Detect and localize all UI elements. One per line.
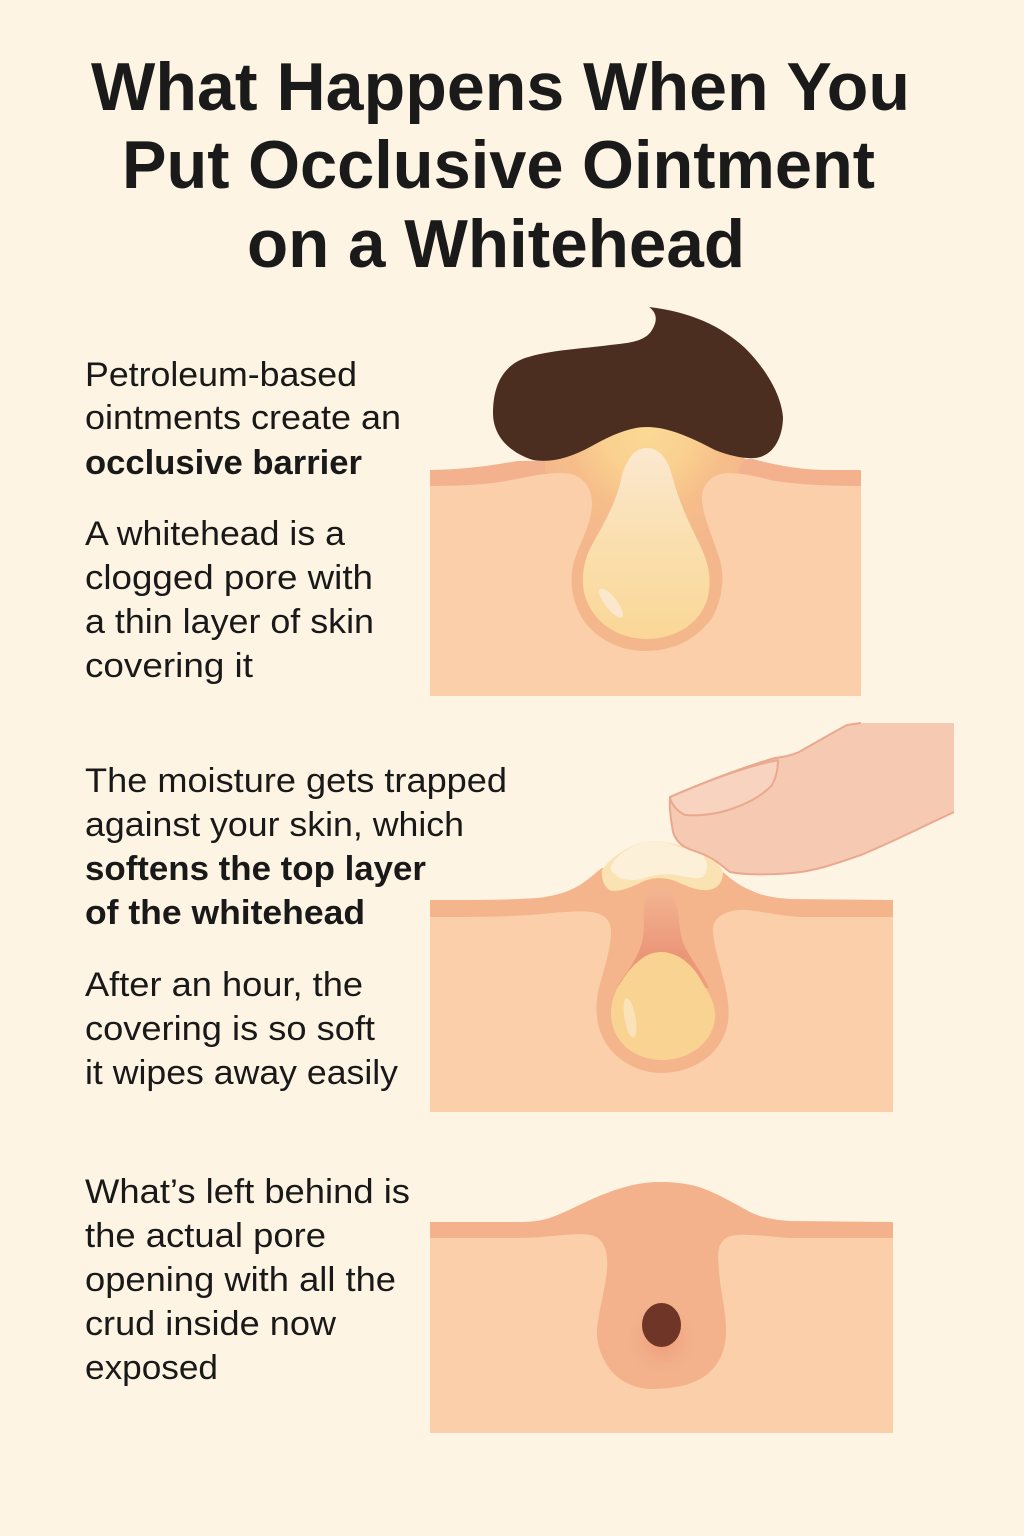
text block: after an hour: covering is so soft xyxy=(85,1010,376,1048)
pore contents xyxy=(642,1303,681,1347)
drop highlight xyxy=(595,585,627,621)
title: on a Whitehead xyxy=(247,206,745,282)
text block: whitehead definition xyxy=(85,515,374,685)
finger xyxy=(670,723,954,874)
skin surface layer and emptied pore xyxy=(430,1182,893,1389)
ointment blob xyxy=(493,307,783,461)
text block: moisture trapped: against your skin, which xyxy=(85,806,464,844)
text block: moisture trapped xyxy=(85,762,507,932)
text block: after an hour: it wipes away easily xyxy=(85,1054,398,1092)
text block: occlusive barrier: ointments create an xyxy=(85,399,401,437)
text block: pore exposed: exposed xyxy=(85,1349,218,1387)
text block: occlusive barrier: Petroleum-based xyxy=(85,356,357,394)
skin panel xyxy=(430,472,861,696)
softened channel xyxy=(618,887,709,988)
text block: whitehead definition: a thin layer of skin xyxy=(85,603,374,641)
text block: pore exposed: the actual pore xyxy=(85,1217,326,1255)
text block: whitehead definition: covering it xyxy=(85,647,254,685)
text block: pore exposed: crud inside now xyxy=(85,1305,336,1343)
finger body xyxy=(670,723,954,874)
text block: pore exposed xyxy=(85,1173,410,1387)
skin panel xyxy=(430,1224,893,1433)
title xyxy=(91,49,910,282)
pore wall with yellow glow xyxy=(545,420,745,651)
text block: moisture trapped: The moisture gets trapped xyxy=(85,762,507,800)
skin surface layer xyxy=(430,459,861,503)
text block: moisture trapped: of the whitehead xyxy=(85,894,365,932)
text block: pore exposed: What’s left behind is xyxy=(85,1173,410,1211)
pale softened skin xyxy=(611,841,707,880)
diagram: open pore xyxy=(430,1182,893,1433)
whitehead drop xyxy=(583,448,710,639)
text block: moisture trapped: softens the top layer xyxy=(85,850,426,888)
diagram: softened whitehead with finger xyxy=(430,723,954,1112)
text block: occlusive barrier xyxy=(85,356,401,482)
text block: whitehead definition: clogged pore with xyxy=(85,559,373,597)
finger outline xyxy=(670,723,954,874)
text block: pore exposed: opening with all the xyxy=(85,1261,396,1299)
text block: after an hour: After an hour, the xyxy=(85,966,363,1004)
text block: whitehead definition: A whitehead is a xyxy=(85,515,345,553)
diagram: ointment on whitehead xyxy=(430,307,861,696)
skin panel xyxy=(430,902,893,1112)
fingernail xyxy=(670,760,778,815)
whitehead sac xyxy=(611,952,715,1060)
text block: occlusive barrier: occlusive barrier xyxy=(85,444,362,482)
softened cap xyxy=(602,841,723,891)
title: Put Occlusive Ointment xyxy=(122,127,875,203)
title: What Happens When You xyxy=(91,49,910,125)
pore inflammation glow xyxy=(620,1298,704,1382)
skin surface layer and pore wall xyxy=(430,868,893,1073)
text block: after an hour xyxy=(85,966,398,1092)
sac highlight xyxy=(621,997,639,1039)
